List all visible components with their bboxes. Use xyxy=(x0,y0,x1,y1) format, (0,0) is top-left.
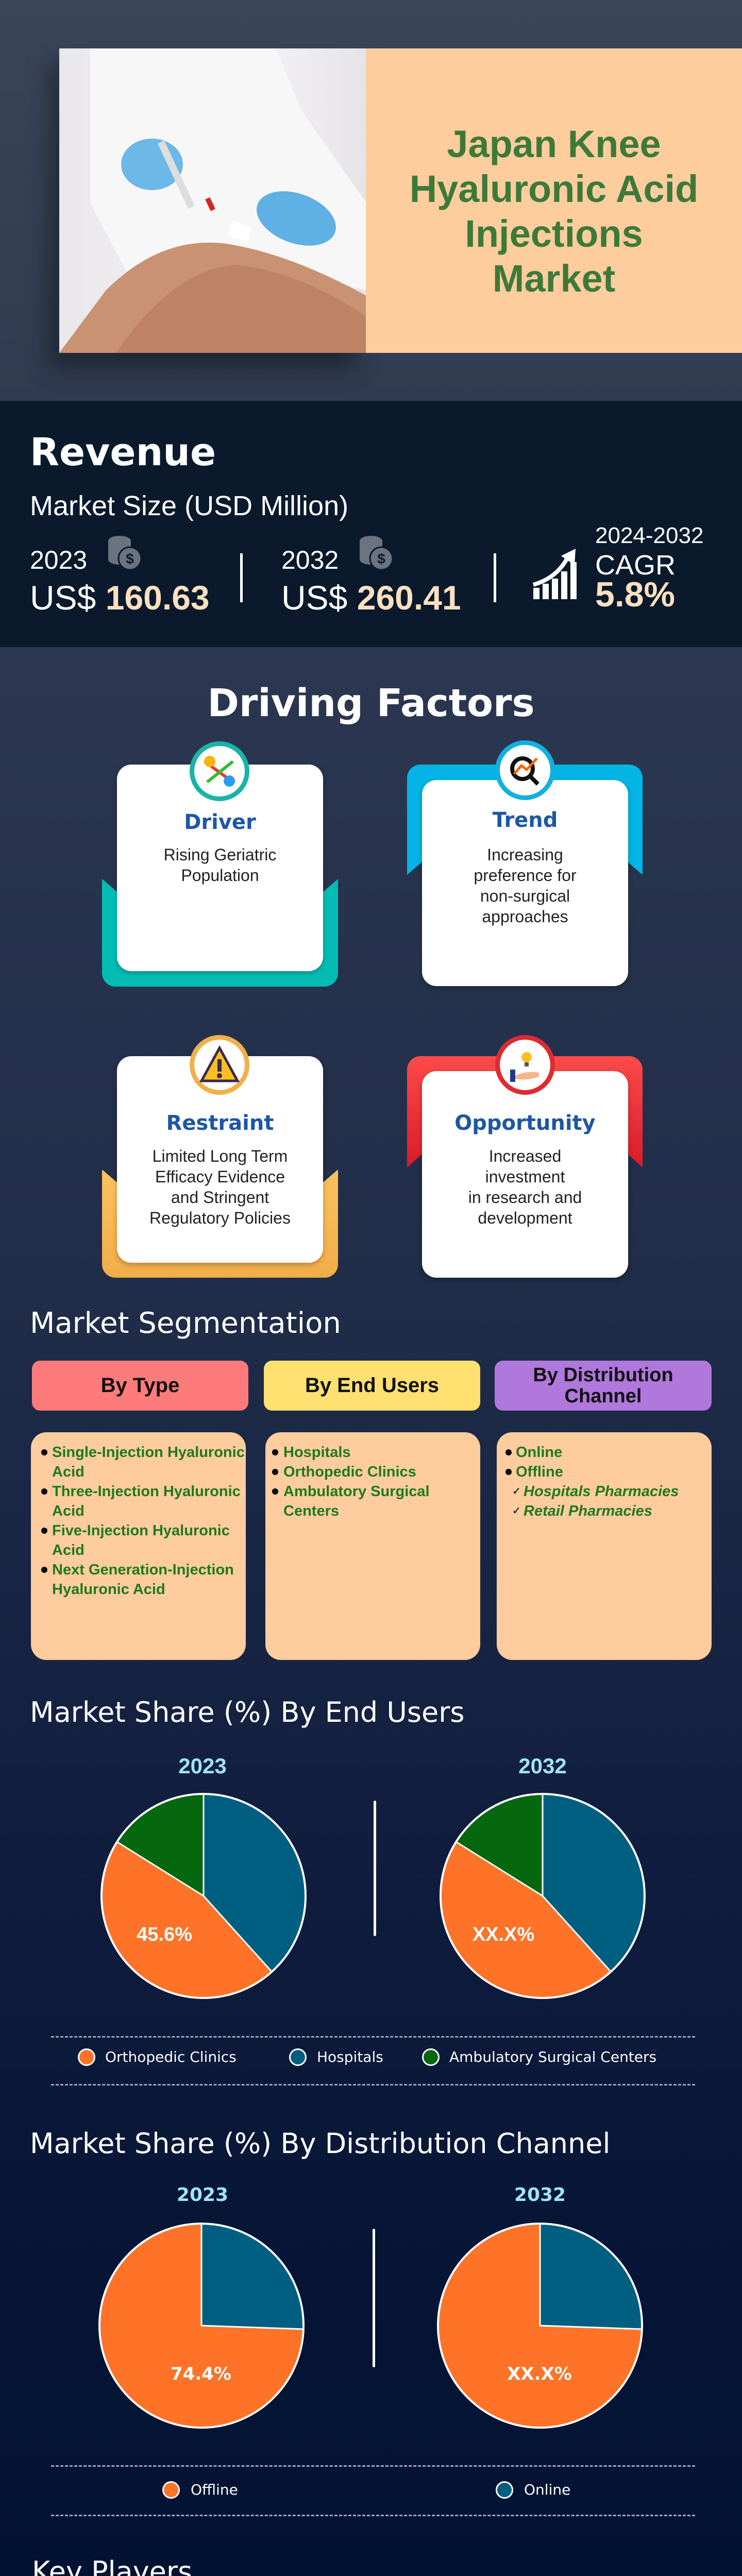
segment list: end users: Ambulatory Surgical xyxy=(283,1483,430,1500)
revenue heading: Revenue xyxy=(30,430,216,474)
segment header: by type xyxy=(32,1361,248,1411)
panel: trend: approaches xyxy=(482,907,568,926)
heading: market share by end users: Market Share (%) By End Users xyxy=(30,1696,465,1728)
segment header: by type: By Type xyxy=(101,1374,179,1397)
segment header: by distribution channel xyxy=(495,1361,712,1411)
pie chart: distribution 2032: XX.X% xyxy=(507,2364,572,2384)
text: 2023 xyxy=(178,1754,227,1778)
segment list: type: Single-Injection Hyaluronic xyxy=(52,1444,245,1461)
CAGR: 5.8% xyxy=(595,575,675,614)
pie chart: distribution 2023 xyxy=(98,2223,305,2429)
panel: restraint: Efficacy Evidence xyxy=(155,1167,285,1186)
panel: driver xyxy=(102,741,338,987)
segment list: type: Acid xyxy=(52,1542,85,1558)
CAGR: 2024-2032 xyxy=(595,523,703,548)
pie chart: distribution 2023: 74.4% xyxy=(171,2364,231,2384)
legend: end users: Ambulatory Surgical Centers xyxy=(449,2048,656,2065)
title panel: Hyaluronic Acid xyxy=(410,167,698,210)
panel: opportunity: Increased xyxy=(489,1147,561,1165)
panel: driver: Driver xyxy=(184,810,256,834)
title panel: Market xyxy=(493,257,615,300)
panel: trend xyxy=(407,740,643,989)
icon: driver xyxy=(190,741,249,801)
segment list: type xyxy=(31,1432,246,1660)
icon: opportunity xyxy=(495,1035,555,1095)
panel: trend: preference for xyxy=(474,866,577,885)
pie chart: end users 2032 xyxy=(440,1793,646,1999)
pie chart: end users 2023 xyxy=(100,1793,307,1999)
heading: driving factors: Driving Factors xyxy=(207,681,535,725)
panel: restraint: Restraint xyxy=(166,1111,274,1135)
heading: market segmentation: Market Segmentation xyxy=(30,1307,341,1340)
segment list: type: Acid xyxy=(52,1503,85,1519)
segment list: type: Five-Injection Hyaluronic xyxy=(52,1522,230,1539)
2023 value: 2023 xyxy=(30,546,87,574)
CAGR: CAGR xyxy=(595,550,676,581)
panel: restraint: Regulatory Policies xyxy=(149,1209,291,1227)
panel: opportunity: investment xyxy=(485,1167,565,1186)
panel: opportunity: Opportunity xyxy=(454,1111,596,1135)
segment list: type: Next Generation-Injection xyxy=(52,1562,234,1578)
legend: distribution: Offline xyxy=(191,2481,238,2498)
2032 value: US$ 260.41 xyxy=(281,579,461,617)
segment list: end users: Hospitals xyxy=(283,1444,351,1461)
panel: opportunity xyxy=(407,1035,643,1280)
panel: restraint: and Stringent xyxy=(171,1188,269,1207)
title panel: Injections xyxy=(465,212,643,255)
icon: coins xyxy=(108,536,140,569)
panel: restraint xyxy=(102,1035,338,1278)
pie chart: end users 2023: 45.6% xyxy=(137,1924,192,1945)
segment list: distribution: Hospitals Pharmacies xyxy=(524,1483,679,1500)
panel: trend: non-surgical xyxy=(480,887,570,905)
segment list: end users: Centers xyxy=(283,1503,339,1519)
legend: end users xyxy=(78,2048,656,2066)
icon: trend xyxy=(495,740,555,800)
segment list: distribution: Offline xyxy=(516,1464,563,1480)
icon: growth chart xyxy=(533,549,577,599)
segment list: distribution xyxy=(497,1432,712,1660)
heading: market share by distribution channel: Market Share (%) By Distribution Channel xyxy=(30,2127,610,2160)
panel: opportunity: development xyxy=(478,1209,572,1227)
panel: opportunity: in research and xyxy=(468,1188,582,1207)
hero photo xyxy=(59,48,366,353)
2032 value: 2032 xyxy=(281,546,339,574)
pie chart: end users 2032: XX.X% xyxy=(473,1924,534,1945)
panel: driver: Population xyxy=(181,866,259,885)
segment list: end users xyxy=(265,1432,480,1660)
market size label: Market Size (USD Million) xyxy=(30,490,348,521)
segment header: by distribution channel: Channel xyxy=(565,1385,642,1407)
segment list: type: Three-Injection Hyaluronic xyxy=(52,1483,241,1500)
icon: coins: $ xyxy=(377,551,385,567)
icon: coins xyxy=(360,536,392,569)
legend: end users: Hospitals xyxy=(317,2048,383,2065)
icon: coins: $ xyxy=(126,551,134,567)
legend: end users: Orthopedic Clinics xyxy=(105,2048,237,2065)
segment list: distribution: Retail Pharmacies xyxy=(524,1503,652,1519)
segment list: type: Acid xyxy=(52,1464,85,1480)
segment list: type: Hyaluronic Acid xyxy=(52,1581,165,1598)
panel: driver: Rising Geriatric xyxy=(164,845,276,864)
text: 2032 xyxy=(514,2184,566,2206)
segment header: by end users xyxy=(264,1361,480,1411)
panel: restraint: Limited Long Term xyxy=(153,1147,288,1165)
icon: warning xyxy=(190,1035,249,1095)
2023 value: US$ 160.63 xyxy=(30,579,210,617)
legend: distribution xyxy=(162,2481,570,2499)
CAGR xyxy=(595,523,703,614)
revenue band xyxy=(0,401,742,647)
panel: trend: Trend xyxy=(493,808,558,832)
title panel xyxy=(366,48,742,353)
segment list: end users: Orthopedic Clinics xyxy=(283,1464,416,1480)
panel: trend: Increasing xyxy=(487,845,563,864)
title panel: Japan Knee xyxy=(447,123,661,165)
segment list: distribution: Online xyxy=(516,1444,562,1461)
text: 2032 xyxy=(518,1754,567,1778)
2023 value xyxy=(30,536,210,617)
segment header: by distribution channel: By Distribution xyxy=(533,1364,673,1386)
segment header: by end users: By End Users xyxy=(305,1374,439,1397)
legend: distribution: Online xyxy=(524,2481,570,2498)
2032 value xyxy=(281,536,461,617)
pie chart: distribution 2032 xyxy=(437,2223,643,2429)
text: 2023 xyxy=(177,2184,228,2206)
